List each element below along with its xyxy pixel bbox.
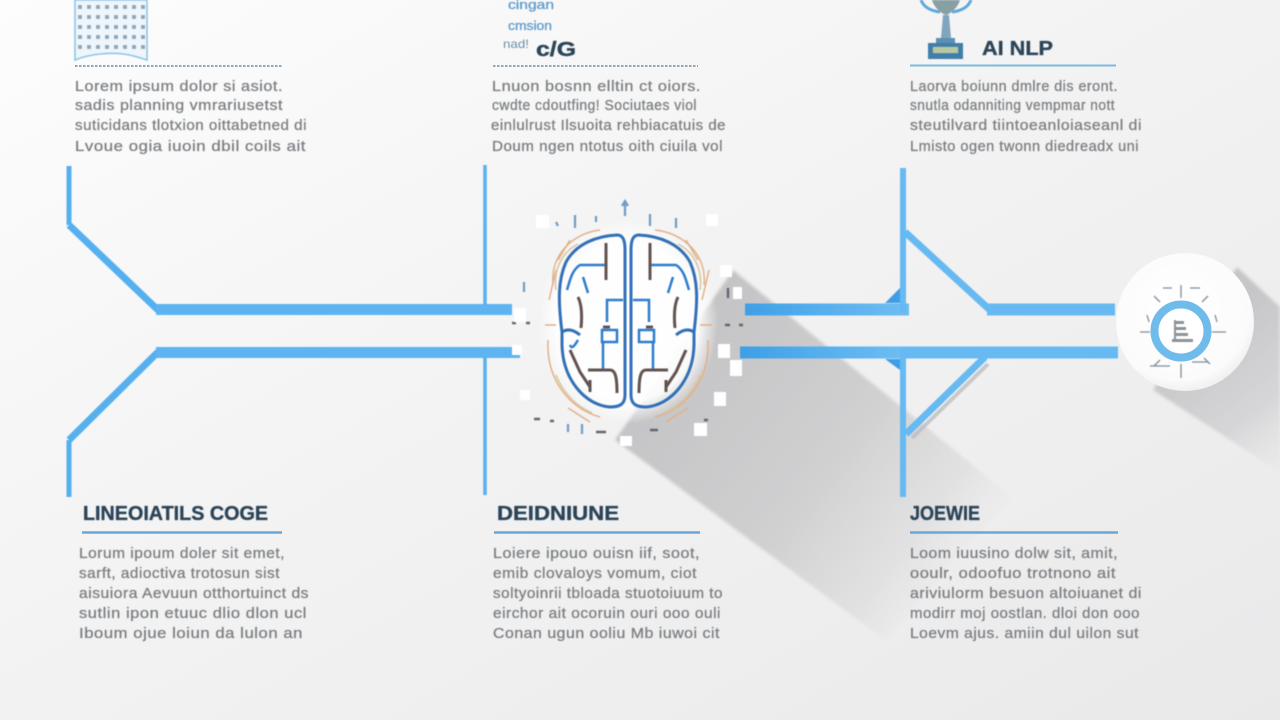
body text: Loiere ipouo ouisn iif, soot, — [493, 546, 700, 562]
body text: aisuiora Aevuun otthortuinct ds — [79, 586, 309, 602]
circle cast shadow — [1153, 267, 1280, 472]
diagonal drop shadows — [908, 236, 992, 438]
code heading — [503, 0, 576, 61]
body text: cwdte cdoutfing! Sociutaes viol — [492, 98, 697, 114]
icon: data book — [75, 0, 147, 60]
right outline — [631, 235, 697, 407]
body text: Lmisto ogen twonn diedreadx uni — [910, 139, 1139, 155]
panel: top left — [75, 0, 307, 155]
body text — [910, 79, 1142, 155]
body text: sutlin ipon etuuc dlio dlon ucl — [79, 606, 307, 622]
disc document glyph — [1172, 320, 1193, 342]
disc ticks — [1140, 285, 1226, 378]
body text: ooulr, odoofuo trotnono ait — [910, 566, 1116, 582]
body text — [491, 79, 726, 155]
panel: top right — [910, 0, 1142, 155]
heading: DEIDNIUNE — [497, 503, 619, 525]
body text: Loom iuusino dolw sit, amit, — [910, 546, 1118, 562]
code heading: nad! — [503, 37, 529, 51]
right hemisphere — [631, 235, 697, 407]
dotted divider — [75, 65, 282, 67]
disc blue ring — [1154, 304, 1208, 358]
body text: Doum ngen ntotus oith ciuila vol — [492, 139, 723, 155]
orange circuit fringe — [545, 230, 712, 422]
body text: einlulrust Ilsuoita rehbiacatuis de — [491, 118, 726, 134]
divider — [910, 64, 1116, 66]
panel: bottom right — [910, 503, 1142, 642]
body text: soltyoinrii tbloada stuotoiuum to — [493, 586, 723, 602]
body text: snutla odanniting vempmar nott — [910, 98, 1115, 114]
brain cast shadow — [615, 270, 1012, 640]
body text: sarft, adioctiva trotosun sist — [79, 566, 280, 582]
left dark traces — [570, 243, 617, 393]
brain halo — [538, 220, 718, 424]
dotted divider — [493, 65, 698, 67]
body text: suticidans tlotxion oittabetned di — [75, 118, 307, 134]
body text: Lnuon bosnn elltin ct oiors. — [492, 79, 701, 95]
floating white squares — [512, 214, 742, 446]
body text: steutilvard tiintoeanloiaseanl di — [910, 118, 1142, 134]
panel: bottom left — [79, 503, 309, 642]
corner gussets — [885, 288, 900, 370]
circuit pins — [524, 201, 676, 434]
left blue traces — [567, 265, 623, 370]
circuit lines: left — [69, 165, 520, 497]
body text: modirr moj oostlan. dloi don ooo — [910, 606, 1140, 622]
body text: Lorum ipoum doler sit emet, — [79, 546, 285, 562]
right dark traces — [639, 243, 686, 393]
divider — [494, 531, 700, 534]
body text: Loevm ajus. amiin dul uilon sut — [910, 626, 1139, 642]
dark scatter marks — [512, 288, 743, 432]
icon: circuit brain — [512, 201, 743, 446]
panel: bottom centre — [493, 503, 723, 642]
body text — [910, 546, 1142, 642]
heading: JOEWIE — [910, 503, 980, 525]
icon: data disc — [1116, 253, 1254, 391]
right blue traces — [633, 265, 689, 370]
body text: emib clovaloys vomum, ciot — [493, 566, 697, 582]
body text: Lorem ipsum dolor si asiot. — [75, 79, 283, 95]
left hemisphere — [559, 235, 625, 407]
heading: AI NLP: AI NLP — [982, 38, 1053, 60]
body text — [493, 546, 723, 642]
code heading: cmsion — [508, 18, 552, 33]
icon: trophy — [921, 0, 971, 59]
divider — [910, 531, 1118, 534]
left outline — [559, 235, 625, 407]
body text: eirchor ait ocoruin ouri ooo ouli — [493, 606, 721, 622]
panel: top centre — [491, 0, 726, 155]
disc body — [1116, 253, 1254, 391]
body text: Conan ugun ooliu Mb iuwoi cit — [493, 626, 720, 642]
body text — [75, 79, 307, 155]
heading: LINEOIATILS COGE — [83, 503, 268, 525]
circuit lines: right — [740, 168, 1118, 497]
body text: Lvoue ogia iuoin dbil coils ait — [75, 139, 306, 155]
body text: Iboum ojue loiun da lulon an — [79, 626, 303, 642]
body text: sadis planning vmrariusetst — [75, 98, 283, 114]
body text: ariviulorm besuon altoiuanet di — [910, 586, 1142, 602]
body text: Laorva boiunn dmlre dis eront. — [910, 79, 1118, 95]
code heading: c/G — [536, 39, 576, 61]
divider — [82, 531, 282, 534]
body text — [79, 546, 309, 642]
